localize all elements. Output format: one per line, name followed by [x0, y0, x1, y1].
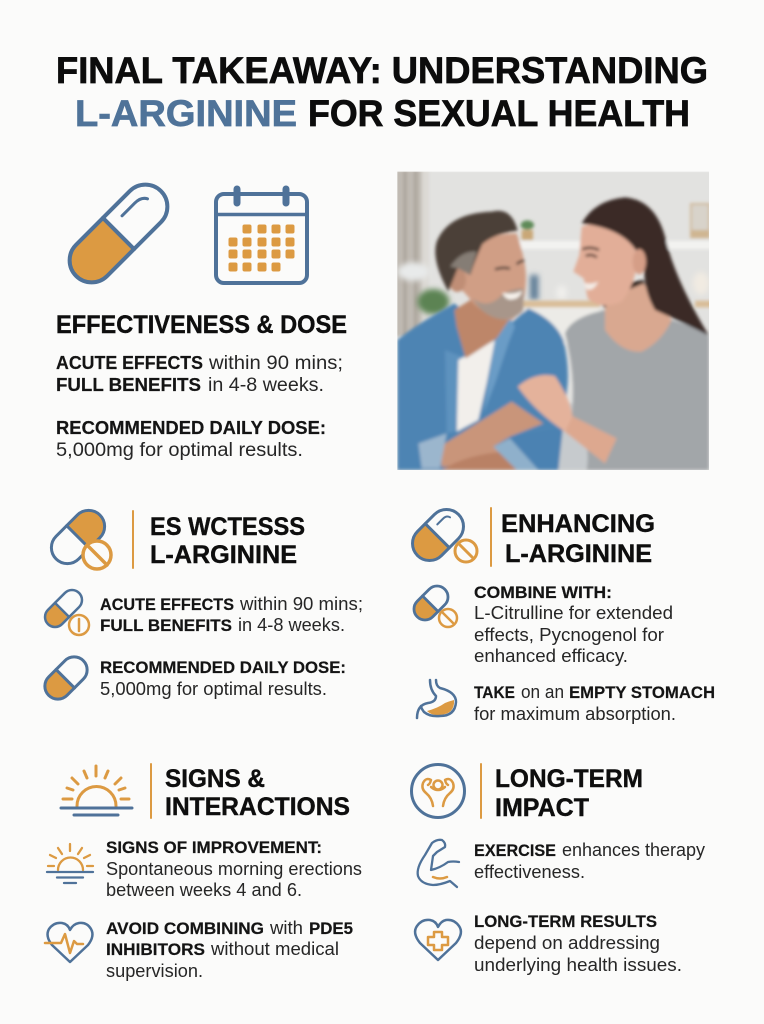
- icon: capsule with no symbol: [45, 504, 111, 570]
- icon: flexed arm: [418, 840, 459, 887]
- text: timing: FULL BENEFITS: [100, 616, 232, 635]
- heading: INTERACTIONS: [165, 793, 350, 821]
- photo: smiling couple holding hands: [397, 172, 709, 470]
- icon: small capsule with tablet: [41, 586, 89, 635]
- text: recommended dose: RECOMMENDED DAILY DOSE:: [56, 418, 326, 438]
- text: timing: ACUTE EFFECTS: [56, 353, 203, 373]
- heading: [165, 765, 350, 821]
- text: recommended dose: 5,000mg for optimal results.: [100, 679, 327, 699]
- divider: [480, 764, 482, 818]
- text: timing: within 90 mins;: [208, 353, 343, 374]
- text: signs of improvement: [106, 838, 362, 900]
- panel: section with garbled heading: [39, 504, 363, 705]
- text: exercise: enhances therapy: [562, 840, 705, 860]
- text: empty stomach: for maximum absorption.: [474, 704, 676, 724]
- icon: stomach: [417, 680, 456, 718]
- title: L-ARGININE: [75, 93, 297, 134]
- woman: [601, 278, 648, 310]
- heading: [501, 510, 655, 568]
- man: [397, 303, 568, 470]
- panel: effectiveness and dose: [56, 176, 347, 461]
- sleeves and arms: [440, 402, 543, 467]
- text: empty stomach: EMPTY STOMACH: [569, 683, 715, 702]
- text: exercise: effectiveness.: [474, 862, 585, 882]
- icon: flexing figure in circle: [412, 764, 464, 818]
- text: recommended dose: [100, 658, 346, 699]
- heading: L-ARGININE: [150, 541, 297, 569]
- heading: SIGNS &: [165, 765, 265, 793]
- icon: capsule: [39, 651, 93, 705]
- text: long-term results: [474, 912, 682, 975]
- heading: ES WCTESSS: [150, 513, 305, 541]
- heading: [495, 765, 643, 822]
- heading: LONG-TERM: [495, 765, 643, 793]
- title: FOR SEXUAL HEALTH: [308, 93, 690, 134]
- heading: [150, 513, 305, 569]
- divider: [150, 764, 152, 818]
- text: empty stomach: TAKE: [474, 683, 515, 702]
- text: avoid combining: without medical: [210, 939, 339, 959]
- text: avoid combining: PDE5: [309, 919, 353, 938]
- text: long-term results: underlying health issues.: [474, 955, 682, 975]
- text: empty stomach: [474, 682, 715, 724]
- text: recommended dose: 5,000mg for optimal results.: [56, 440, 303, 461]
- text: timing: in 4-8 weeks.: [238, 615, 345, 635]
- panel: long-term impact: [412, 764, 705, 975]
- text: long-term results: LONG-TERM RESULTS: [474, 912, 657, 931]
- text: avoid combining: with: [269, 918, 303, 938]
- title: FINAL TAKEAWAY: UNDERSTANDING: [56, 50, 708, 91]
- text: recommended dose: RECOMMENDED DAILY DOSE:: [100, 658, 346, 677]
- heading: effectiveness and dose: EFFECTIVENESS & DOSE: [56, 311, 347, 339]
- text: signs of improvement: SIGNS OF IMPROVEMENT:: [106, 838, 322, 857]
- text: empty stomach: on an: [521, 682, 564, 702]
- text: combine with: L-Citrulline for extended: [474, 603, 673, 623]
- text: avoid combining: AVOID COMBINING: [106, 919, 264, 938]
- text: exercise: EXERCISE: [474, 841, 556, 860]
- text: avoid combining: supervision.: [106, 961, 203, 981]
- text: combine with: enhanced efficacy.: [474, 646, 628, 666]
- text: avoid combining: [106, 918, 353, 981]
- text: avoid combining: INHIBITORS: [106, 940, 205, 959]
- text: timing: [100, 594, 363, 635]
- text: timing: within 90 mins;: [239, 594, 363, 614]
- icon: small sunrise: [47, 844, 93, 883]
- text: timing: ACUTE EFFECTS: [100, 595, 234, 614]
- panel: enhancing L-arginine: [405, 502, 715, 724]
- icon: heart with plus: [415, 920, 461, 960]
- divider: [132, 511, 134, 568]
- text: timing: FULL BENEFITS: [56, 375, 201, 395]
- text: signs of improvement: Spontaneous morning erections: [106, 859, 362, 879]
- text: combine with: COMBINE WITH:: [474, 583, 612, 602]
- icon: heart with pulse: [45, 923, 92, 962]
- title: [56, 50, 708, 134]
- icon: capsule with no symbol: [405, 502, 477, 568]
- panel: signs and interactions: [45, 764, 362, 981]
- icon: sunrise: [61, 766, 132, 815]
- heading: L-ARGININE: [505, 540, 652, 568]
- text: signs of improvement: between weeks 4 and 6.: [106, 880, 302, 900]
- heading: ENHANCING: [501, 510, 655, 538]
- icon: large capsule: [61, 176, 176, 291]
- text: combine with: [474, 583, 673, 666]
- text: timing: in 4-8 weeks.: [208, 375, 324, 396]
- heading: IMPACT: [495, 794, 589, 822]
- text: exercise: [474, 840, 705, 882]
- text: recommended dose: [56, 418, 326, 461]
- text: combine with: effects, Pycnogenol for: [474, 625, 664, 645]
- icon: calendar: [216, 189, 307, 283]
- text: long-term results: depend on addressing: [474, 933, 660, 953]
- icon: small capsule with no symbol: [409, 581, 457, 627]
- text: timing: [56, 353, 343, 396]
- divider: [490, 508, 492, 566]
